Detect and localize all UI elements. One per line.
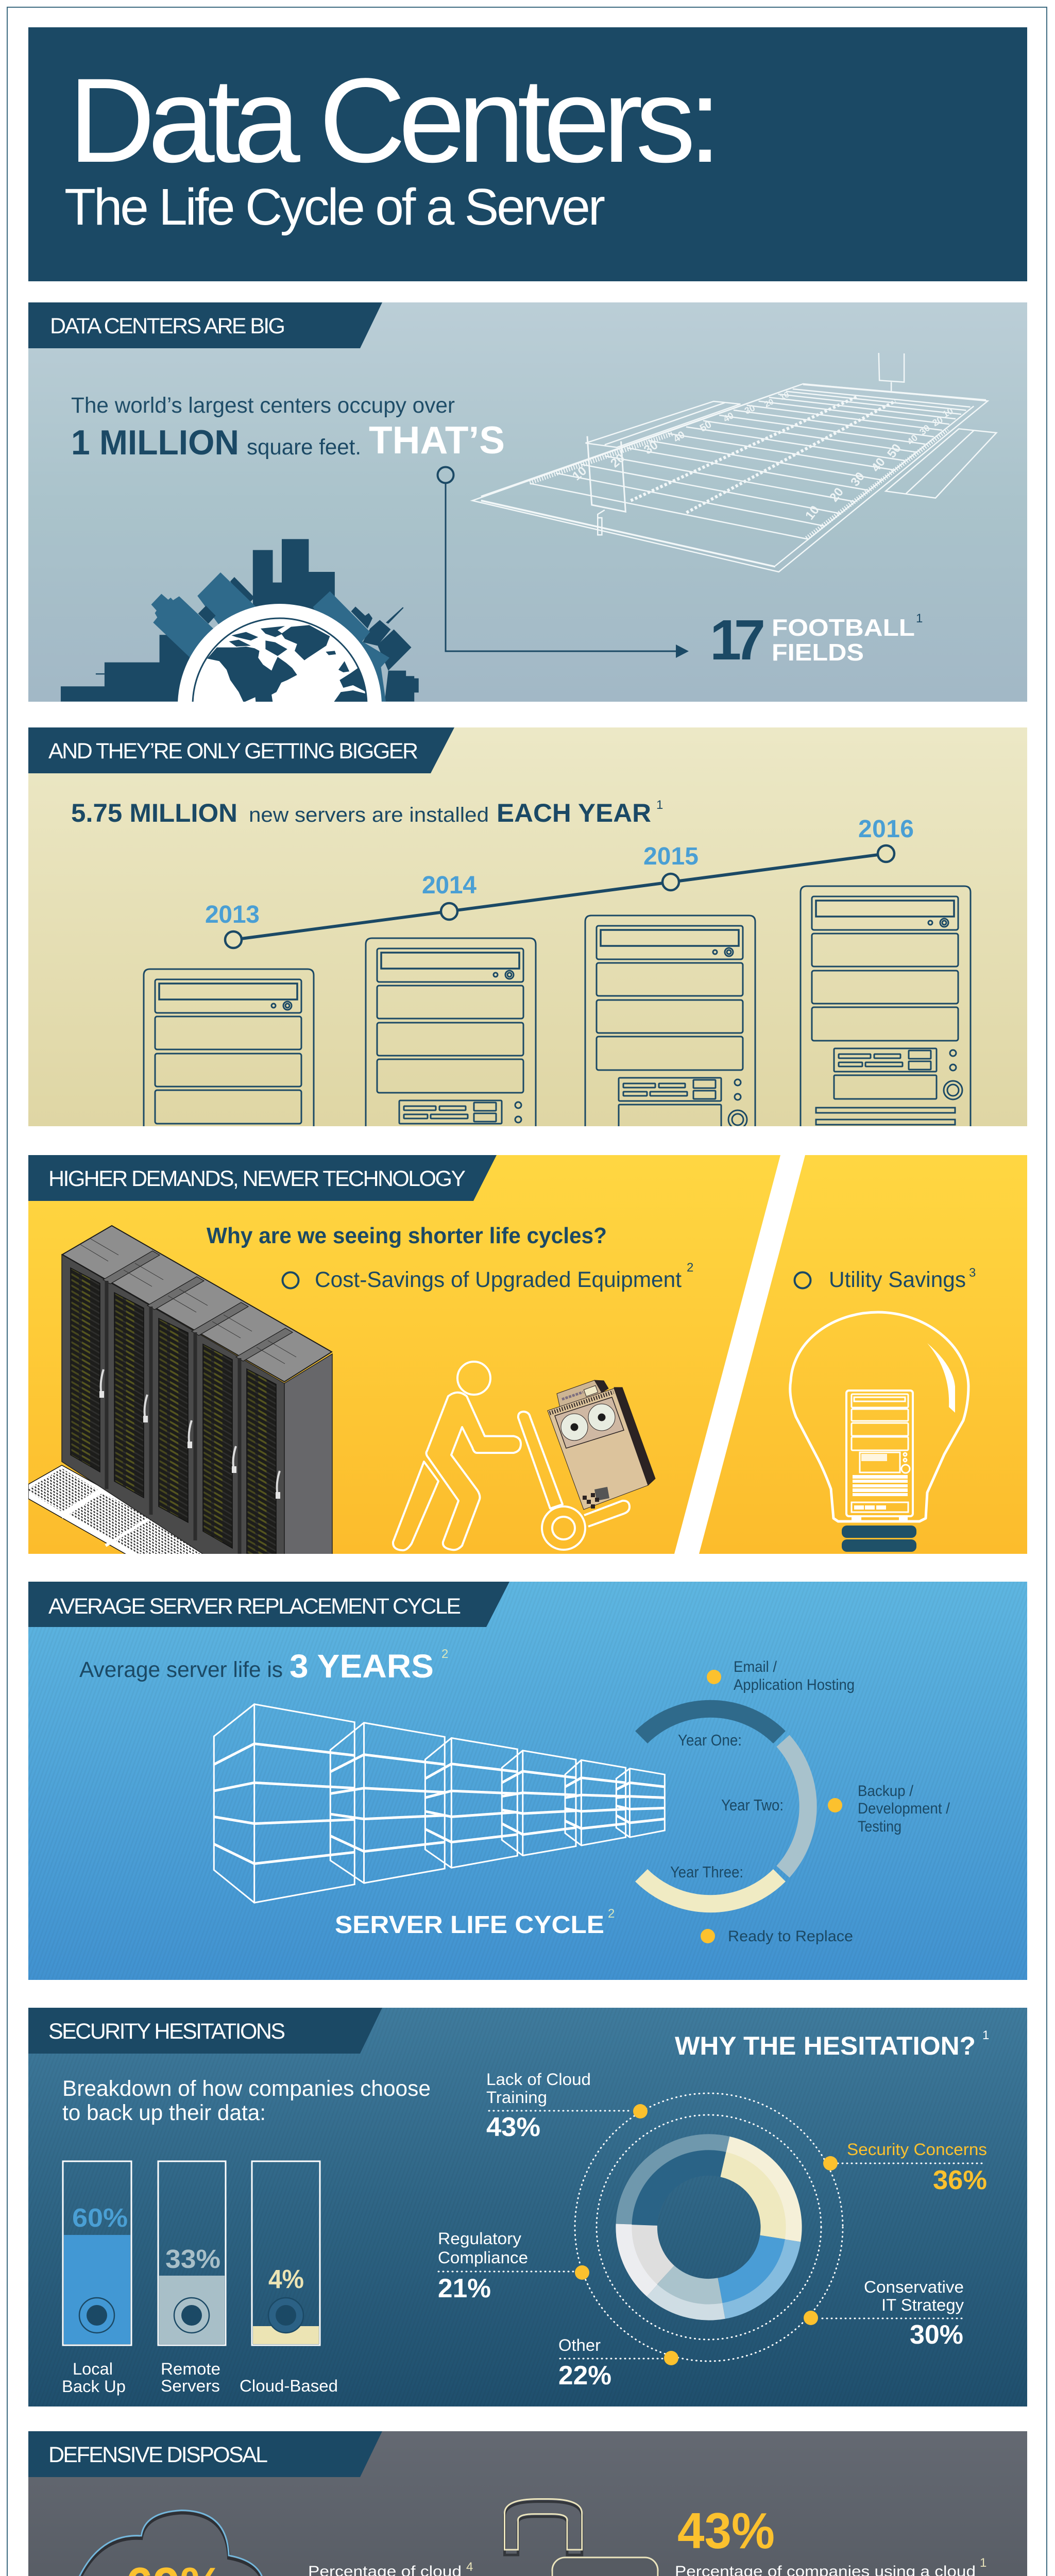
chart: hesitation donut bbox=[575, 2093, 843, 2361]
stat: three years: 3 YEARS bbox=[290, 1648, 434, 1685]
ring year labels: Year Three: bbox=[670, 1863, 743, 1881]
section tab bbox=[28, 302, 382, 348]
cloud provider text bbox=[308, 2560, 473, 2576]
breakdown text: to back up their data: bbox=[62, 2100, 266, 2125]
field yard numbers: 30 bbox=[743, 402, 757, 416]
stat: 5.75 million new servers: EACH YEAR bbox=[497, 799, 651, 827]
field yard numbers: 40 bbox=[869, 455, 888, 474]
callout: backup development testing: Development / bbox=[858, 1800, 950, 1817]
stat: three years: 2 bbox=[441, 1647, 448, 1661]
illustration: server racks bbox=[28, 1225, 333, 1554]
stat: 17 football fields: 1 bbox=[916, 612, 923, 625]
section tab: DATA CENTERS ARE BIG bbox=[50, 314, 285, 338]
arrow: connector to football fields bbox=[438, 467, 689, 658]
bullet: cost savings: Cost-Savings of Upgraded Equipment bbox=[315, 1267, 682, 1292]
callout: backup development testing: Backup / bbox=[858, 1783, 914, 1800]
section tab: DEFENSIVE DISPOSAL bbox=[48, 2443, 268, 2467]
callout: regulatory compliance: 21% bbox=[438, 2274, 491, 2303]
callout: backup development testing bbox=[828, 1783, 950, 1835]
callout: conservative it strategy: IT Strategy bbox=[881, 2296, 964, 2314]
server life cycle label: SERVER LIFE CYCLE bbox=[335, 1911, 604, 1939]
bar: local back up bbox=[62, 2161, 131, 2396]
bullet: utility savings: 3 bbox=[969, 1266, 976, 1280]
callout: conservative it strategy: Conservative bbox=[864, 2278, 964, 2296]
icon: cloud bbox=[78, 2510, 288, 2576]
illustration: skyline and globe bbox=[61, 539, 419, 702]
breakdown text bbox=[62, 2076, 431, 2125]
title: Data Centers: bbox=[69, 54, 722, 188]
stat: three years: Average server life is bbox=[79, 1657, 283, 1682]
stat: 1 million square feet bbox=[71, 418, 505, 462]
bar: local back up: Local bbox=[73, 2360, 113, 2378]
icon: open padlock bbox=[505, 2499, 658, 2576]
tower 2015 bbox=[584, 915, 756, 1126]
callout: email and application hosting: Application Hosting bbox=[734, 1676, 855, 1693]
security lapse text bbox=[675, 2556, 986, 2576]
bar: cloud-based: 4% bbox=[268, 2264, 304, 2294]
bar: cloud-based bbox=[240, 2161, 338, 2395]
section tab: AVERAGE SERVER REPLACEMENT CYCLE bbox=[48, 1594, 461, 1619]
field yard numbers: 20 bbox=[763, 397, 775, 409]
callout: lack of cloud training: Lack of Cloud bbox=[486, 2070, 591, 2089]
section tab bbox=[28, 1155, 497, 1201]
callout: lack of cloud training: Training bbox=[486, 2088, 547, 2107]
illustration: football field bbox=[472, 353, 996, 572]
field yard numbers: 10 bbox=[778, 390, 791, 402]
security lapse text: 1 bbox=[980, 2556, 986, 2570]
stat: 5.75 million new servers: 5.75 MILLION bbox=[71, 799, 237, 827]
field yard numbers: 30 bbox=[641, 438, 660, 457]
stat: three years bbox=[79, 1647, 448, 1685]
section tab: HIGHER DEMANDS, NEWER TECHNOLOGY bbox=[48, 1166, 466, 1191]
server towers bbox=[144, 886, 971, 1216]
growth line with year markers: 2013 bbox=[205, 901, 260, 928]
tower 2014 bbox=[365, 938, 537, 1126]
illustration: light bulb with server bbox=[790, 1312, 968, 1552]
question heading: Why are we seeing shorter life cycles? bbox=[207, 1223, 607, 1248]
field yard numbers: 10 bbox=[803, 503, 822, 522]
callout: other: Other bbox=[558, 2336, 601, 2354]
cloud provider text: 4 bbox=[466, 2560, 473, 2574]
server life cycle label: 2 bbox=[608, 1907, 615, 1921]
bullet: cost savings: 2 bbox=[687, 1261, 693, 1275]
tower 2016 bbox=[801, 886, 971, 1133]
hesitation heading: 1 bbox=[982, 2028, 989, 2042]
field yard numbers: 10 bbox=[941, 405, 955, 419]
panel: data centers are big bbox=[28, 302, 1027, 702]
bar: cloud-based: Cloud-Based bbox=[240, 2377, 338, 2395]
section tab: AND THEY’RE ONLY GETTING BIGGER bbox=[48, 739, 418, 764]
subtitle: The Life Cycle of a Server bbox=[64, 178, 605, 236]
callout: backup development testing: Testing bbox=[858, 1818, 901, 1835]
field yard numbers: 40 bbox=[905, 432, 920, 447]
intro text: The world’s largest centers occupy over bbox=[71, 393, 455, 418]
tower 2013 bbox=[143, 969, 314, 1126]
ring year labels bbox=[670, 1731, 784, 1881]
callout: regulatory compliance bbox=[438, 2229, 589, 2303]
stat: 1 million square feet: square feet. bbox=[247, 435, 361, 460]
panel: defensive disposal bbox=[28, 2431, 1027, 2576]
field yard numbers: 40 bbox=[721, 410, 736, 424]
callout: conservative it strategy: 30% bbox=[910, 2320, 963, 2350]
growth line with year markers: 2014 bbox=[422, 872, 477, 899]
callout: other bbox=[558, 2336, 678, 2391]
bar: local back up: Back Up bbox=[62, 2377, 126, 2396]
title banner bbox=[28, 27, 1027, 281]
field yard numbers: 30 bbox=[917, 422, 932, 437]
bar: remote servers: Remote bbox=[161, 2360, 220, 2378]
bullet: utility savings: Utility Savings bbox=[829, 1267, 966, 1292]
callout: other: 22% bbox=[558, 2361, 611, 2391]
field yard numbers: 20 bbox=[827, 485, 846, 504]
growth line with year markers: 2015 bbox=[643, 843, 699, 870]
callout: email and application hosting: Email / bbox=[734, 1658, 777, 1675]
stat: 43 percent: 43% bbox=[677, 2502, 775, 2559]
illustration: person pushing hand truck bbox=[393, 1362, 629, 1550]
stat: 5.75 million new servers bbox=[71, 798, 663, 827]
callout: security concerns bbox=[823, 2140, 987, 2195]
panel: average server replacement cycle bbox=[28, 1582, 1027, 1980]
field yard numbers: 10 bbox=[570, 464, 589, 483]
callout: security concerns: Security Concerns bbox=[847, 2140, 987, 2159]
bar: remote servers: 33% bbox=[165, 2244, 220, 2274]
section tab: SECURITY HESITATIONS bbox=[48, 2019, 285, 2044]
panel: security hesitations bbox=[28, 2008, 1027, 2406]
growth line with year markers bbox=[205, 816, 914, 948]
panel: higher demands bbox=[28, 1155, 1027, 1554]
field yard numbers: 20 bbox=[930, 414, 945, 428]
breakdown text: Breakdown of how companies choose bbox=[62, 2076, 431, 2101]
stat: 17 football fields: FOOTBALL bbox=[772, 614, 915, 641]
panel: getting bigger bbox=[28, 727, 1027, 1126]
illustration: tape drive bbox=[548, 1380, 655, 1510]
field yard numbers: 50 bbox=[884, 442, 904, 461]
callout: ready to replace: Ready to Replace bbox=[728, 1928, 853, 1945]
growth line with year markers: 2016 bbox=[858, 816, 914, 843]
field yard numbers: 30 bbox=[848, 470, 867, 489]
field yard numbers: 20 bbox=[608, 451, 627, 470]
section tab bbox=[28, 2008, 382, 2054]
callout: regulatory compliance: Compliance bbox=[438, 2248, 528, 2267]
bar: remote servers bbox=[158, 2161, 226, 2395]
field yard numbers: 40 bbox=[671, 429, 687, 445]
field yard numbers: 50 bbox=[698, 419, 713, 434]
section tab bbox=[28, 2431, 382, 2477]
callout: email and application hosting bbox=[707, 1658, 855, 1693]
stat: 17 football fields: 17 bbox=[710, 608, 765, 672]
callout: security concerns: 36% bbox=[933, 2165, 987, 2195]
hesitation heading: WHY THE HESITATION? bbox=[675, 2031, 976, 2060]
chart: life cycle ring bbox=[641, 1709, 808, 1904]
section tab bbox=[28, 727, 454, 773]
callout: regulatory compliance: Regulatory bbox=[438, 2229, 521, 2248]
ring year labels: Year Two: bbox=[721, 1796, 784, 1814]
bar: local back up: 60% bbox=[72, 2203, 128, 2232]
ring year labels: Year One: bbox=[678, 1731, 742, 1749]
stat: 1 million square feet: 1 MILLION bbox=[71, 423, 239, 462]
bar: remote servers: Servers bbox=[161, 2377, 220, 2395]
illustration: wireframe server row bbox=[214, 1704, 665, 1903]
stat: 5.75 million new servers: new servers are installed bbox=[249, 804, 489, 826]
callout: lack of cloud training bbox=[486, 2070, 648, 2142]
stat: 5.75 million new servers: 1 bbox=[656, 798, 663, 812]
callout: lack of cloud training: 43% bbox=[486, 2112, 540, 2142]
stat: 1 million square feet: THAT’S bbox=[369, 418, 505, 462]
callout: conservative it strategy bbox=[804, 2278, 964, 2350]
section tab bbox=[28, 1582, 509, 1627]
field yard numbers bbox=[570, 390, 955, 522]
stat: 17 football fields: FIELDS bbox=[772, 639, 864, 666]
stat: 17 football fields bbox=[710, 608, 923, 672]
